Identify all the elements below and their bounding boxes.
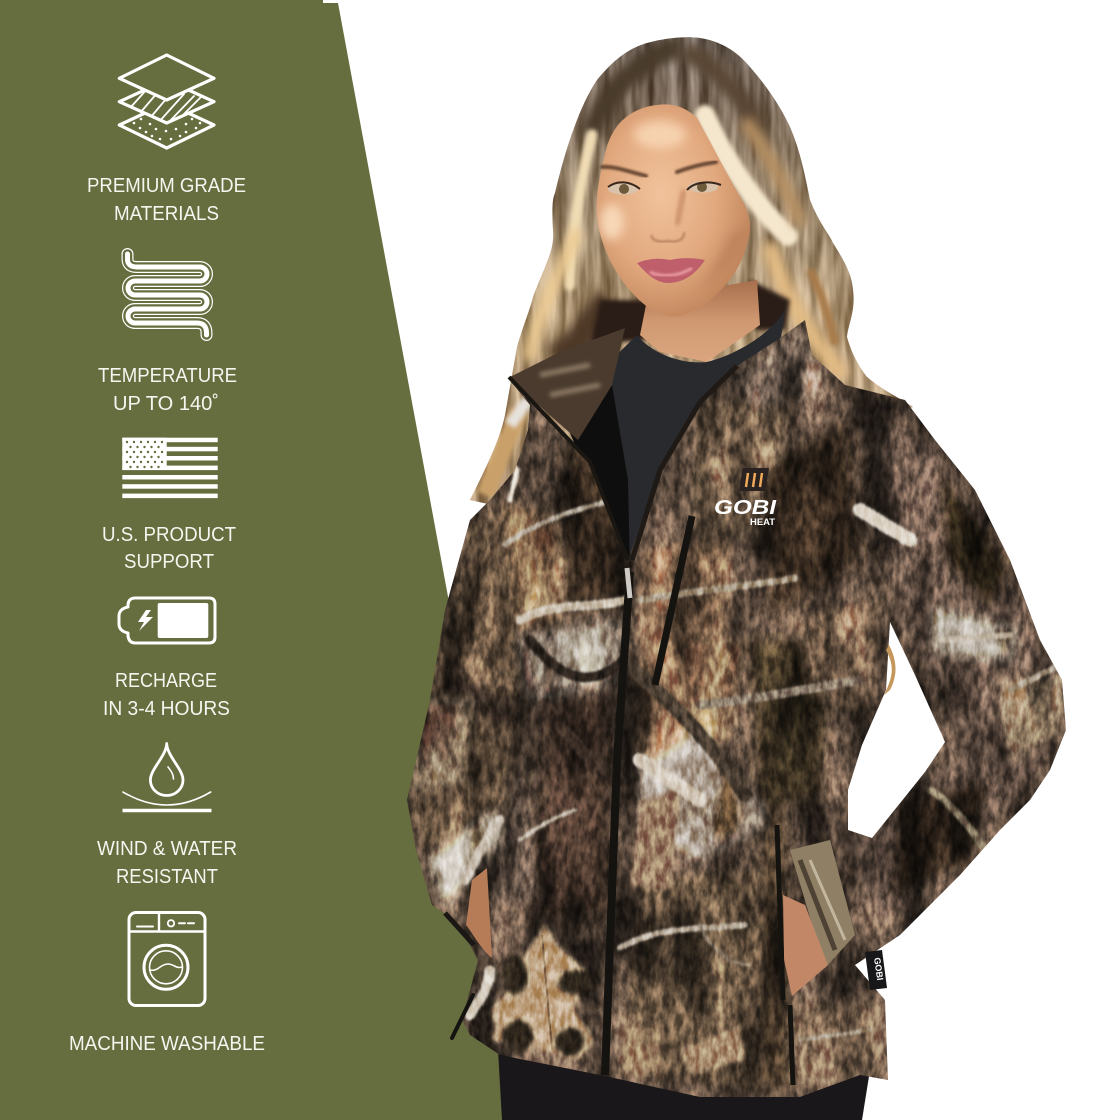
icon: american flag	[122, 438, 218, 498]
inner left collar	[508, 328, 625, 440]
GOBI HEAT chest logo: HEAT	[750, 517, 776, 527]
feature: wind and water resistant	[97, 744, 237, 888]
hair	[470, 37, 913, 504]
right hand	[783, 895, 828, 996]
main zipper	[509, 366, 737, 1075]
face	[597, 104, 750, 317]
feature: recharge in 3-4 hours	[103, 598, 230, 720]
drawcord	[452, 995, 473, 1038]
label: temperature up to 140: UP TO 140˚	[113, 393, 219, 415]
GOBI HEAT chest logo	[714, 497, 777, 527]
sleeve tag	[865, 950, 887, 990]
label: recharge in 3-4 hours: RECHARGE	[115, 670, 217, 692]
white gap between arm and torso	[848, 622, 945, 838]
panel: olive feature sidebar	[0, 0, 545, 1120]
icon: charging battery	[119, 598, 215, 643]
label: U.S. product support: SUPPORT	[124, 551, 214, 573]
leggings	[498, 1050, 870, 1120]
label: premium grade materials: PREMIUM GRADE	[87, 175, 246, 197]
label: recharge in 3-4 hours	[103, 670, 230, 720]
photo: woman wearing camo heated jacket	[400, 30, 1080, 1110]
sleeve tag: GOBI	[872, 957, 885, 981]
jacket with camo print	[400, 310, 1080, 1110]
leaf print	[490, 790, 745, 1075]
left sleeve lining	[445, 913, 474, 945]
left hand	[466, 868, 492, 958]
neck shadow	[590, 280, 790, 345]
label: premium grade materials	[87, 175, 246, 225]
feature: premium grade materials	[87, 55, 246, 225]
feature: U.S. product support	[102, 438, 236, 573]
label: wind and water resistant: RESISTANT	[116, 866, 218, 888]
label: U.S. product support	[102, 524, 236, 573]
neck	[640, 280, 760, 362]
icon: material layers	[119, 55, 214, 148]
eyebrows	[602, 162, 716, 176]
icon: washing machine	[129, 912, 205, 1006]
feature: machine washable	[69, 912, 265, 1055]
icon: heating coil	[128, 254, 207, 335]
side pocket zipper	[777, 825, 793, 1085]
feature: temperature up to 140	[98, 254, 237, 415]
label: recharge in 3-4 hours: IN 3-4 HOURS	[103, 698, 230, 720]
label: wind and water resistant	[97, 838, 237, 888]
branch print	[465, 450, 1060, 1040]
chest pocket zipper	[655, 516, 692, 685]
GOBI HEAT chest logo: GOBI	[714, 497, 777, 519]
chest patch logo	[739, 468, 769, 491]
turtleneck and lining	[560, 310, 785, 570]
icon: water drop on membrane	[122, 744, 212, 810]
label: premium grade materials: MATERIALS	[114, 203, 219, 225]
label: temperature up to 140	[98, 365, 237, 415]
hair wisp	[884, 645, 896, 695]
lips	[637, 258, 705, 283]
label: machine washable: MACHINE WASHABLE	[69, 1033, 265, 1055]
cuff	[790, 840, 855, 968]
eyes	[608, 182, 721, 194]
label: U.S. product support: U.S. PRODUCT	[102, 524, 236, 546]
label: wind and water resistant: WIND & WATER	[97, 838, 237, 860]
label: temperature up to 140: TEMPERATURE	[98, 365, 237, 387]
nose	[652, 232, 684, 242]
